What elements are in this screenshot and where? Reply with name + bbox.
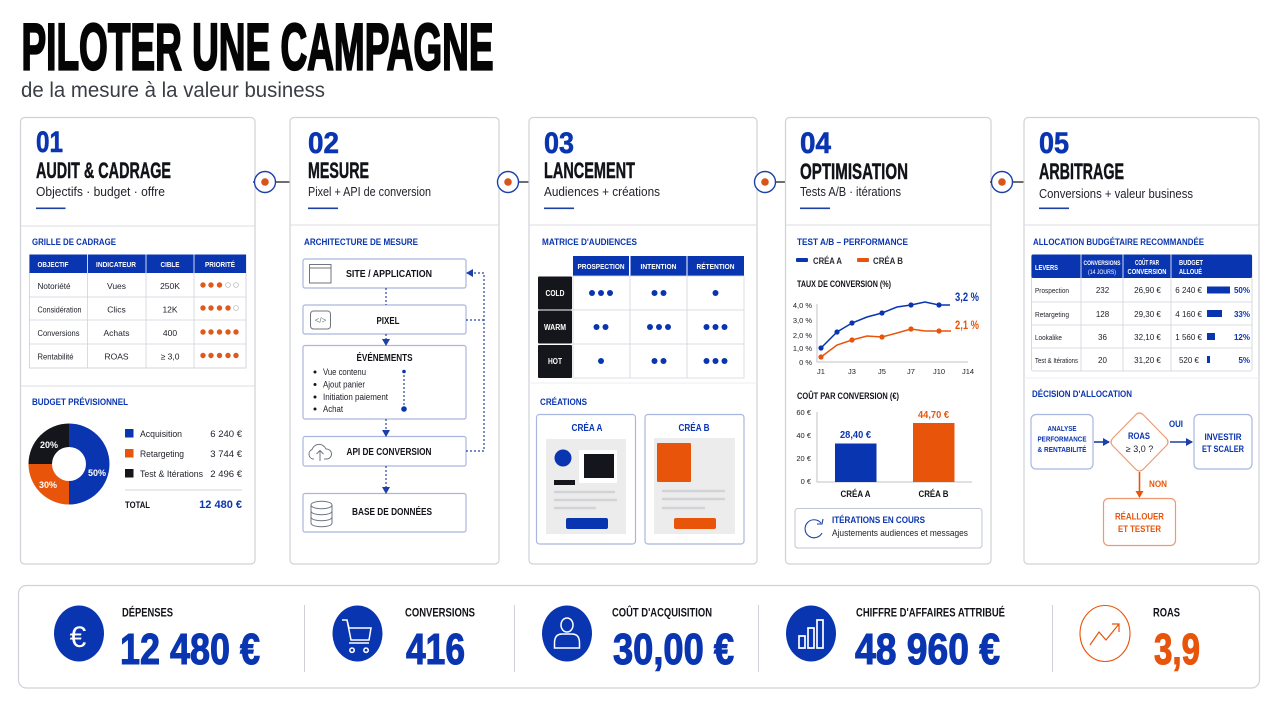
box: evenements: Ajout panier	[323, 380, 365, 390]
line chart: taux de conversion: 3,0 %	[793, 316, 812, 325]
KPI: depenses: €	[70, 621, 87, 654]
legend: budget: 6 240 €	[210, 429, 243, 440]
legend: budget	[125, 429, 243, 511]
box: analyse: PERFORMANCE	[1038, 436, 1087, 444]
table: allocation: 520 €	[1179, 356, 1200, 365]
step number 05: 05	[1039, 127, 1069, 160]
bar chart: cout par conversion: 0 €	[801, 477, 812, 486]
box: investir: INVESTIR	[1204, 432, 1242, 443]
table: allocation: Retargeting	[1035, 310, 1069, 319]
matrix: audiences: HOT	[548, 357, 562, 366]
bar chart: cout par conversion: 60 €	[796, 408, 812, 417]
donut chart: budget: 20%	[40, 440, 58, 450]
subheading: Audiences + créations	[544, 184, 660, 199]
line chart: taux de conversion: TAUX DE CONVERSION (%)	[797, 279, 891, 289]
table: allocation: 4 160 €	[1175, 310, 1203, 319]
bar chart: cout par conversion: 44,70 €	[918, 410, 949, 421]
heading: architecture de mesure: ARCHITECTURE DE MESURE	[304, 237, 418, 248]
box: reallouer	[1104, 498, 1176, 546]
table: allocation: BUDGET	[1179, 260, 1204, 267]
matrix: audiences: INTENTION	[640, 262, 676, 271]
table: allocation: Test & Itérations	[1035, 356, 1078, 365]
connector 3	[754, 172, 786, 192]
table: allocation: COÛT PAR	[1135, 258, 1159, 267]
table: allocation: 26,90 €	[1134, 286, 1161, 295]
box: investir	[1194, 414, 1252, 469]
card: crea A	[536, 414, 636, 544]
box: site application	[303, 259, 466, 288]
table: allocation: 5%	[1238, 356, 1250, 365]
donut chart: budget: 50%	[88, 468, 106, 478]
box: pixel: </>	[315, 316, 327, 325]
panel: 02 mesure	[290, 118, 499, 564]
table: allocation	[1032, 254, 1252, 371]
label: non: NON	[1149, 479, 1167, 490]
heading: audit et cadrage: AUDIT & CADRAGE	[36, 158, 171, 183]
bar chart: cout par conversion: 20 €	[796, 454, 812, 463]
bar chart: cout par conversion: COÛT PAR CONVERSION (€)	[797, 390, 899, 401]
heading: grille de cadrage: GRILLE DE CADRAGE	[32, 237, 116, 248]
heading: allocation budgetaire: ALLOCATION BUDGÉTAIRE RECOMMANDÉE	[1033, 237, 1204, 248]
table: grille de cadrage: 12K	[162, 304, 178, 314]
KPI: depenses: DÉPENSES	[122, 604, 173, 620]
bar chart: cout par conversion	[796, 390, 972, 500]
table: grille de cadrage: Vues	[107, 281, 126, 291]
legend: A/B: CRÉA B	[873, 256, 903, 267]
step number 02: 02	[308, 127, 339, 160]
line chart: taux de conversion: J10	[933, 367, 945, 376]
box: pixel: PIXEL	[376, 316, 400, 327]
box: base de donnees: BASE DE DONNÉES	[352, 505, 432, 518]
table: allocation: 32,10 €	[1134, 333, 1161, 342]
subtitle: de la mesure à la valeur business	[21, 79, 325, 102]
heading: arbitrage: ARBITRAGE	[1039, 159, 1124, 184]
matrix: audiences: WARM	[544, 323, 566, 332]
table: grille de cadrage: Rentabilité	[38, 352, 74, 362]
KPI: chiffre d'affaires: 48 960 €	[855, 626, 1000, 674]
legend: budget: 12 480 €	[199, 499, 242, 511]
table: allocation: 36	[1098, 333, 1107, 342]
KPI: conversions: CONVERSIONS	[405, 606, 475, 620]
arrow: oui	[1170, 441, 1192, 443]
card: crea B: CRÉA B	[678, 421, 710, 434]
legend: budget: Test & Itérations	[140, 469, 203, 480]
table: allocation: 1 560 €	[1175, 333, 1203, 342]
line chart: taux de conversion: 3,2 %	[955, 292, 979, 304]
line chart: taux de conversion: J1	[817, 367, 825, 376]
KPI: cout d'acquisition	[542, 604, 734, 674]
donut chart: budget: 30%	[39, 480, 57, 490]
line chart: taux de conversion: 2,0 %	[793, 331, 812, 340]
KPI: roas	[1080, 606, 1200, 674]
table: grille de cadrage: ROAS	[104, 352, 129, 362]
panel: 04 optimisation	[786, 118, 991, 564]
connector 2	[497, 172, 530, 192]
box: investir: ET SCALER	[1202, 444, 1244, 455]
subheading: Tests A/B · itérations	[800, 184, 901, 199]
box: evenements: ÉVÉNEMENTS	[356, 351, 413, 364]
table: allocation: 6 240 €	[1175, 286, 1203, 295]
table: grille de cadrage: ≥ 3,0	[161, 352, 180, 362]
line chart: taux de conversion	[793, 279, 979, 376]
box: pixel	[303, 305, 466, 334]
KPI: depenses: 12 480 €	[120, 626, 260, 674]
line chart: taux de conversion: 0 %	[799, 358, 812, 367]
table: allocation: 232	[1096, 286, 1110, 295]
heading: mesure: MESURE	[308, 158, 369, 183]
table: allocation: CONVERSION	[1128, 269, 1166, 276]
panel: 01 audit et cadrage	[20, 118, 255, 564]
box: evenements: Achat	[323, 404, 343, 414]
table: grille de cadrage: Achats	[104, 328, 130, 338]
table: allocation: 50%	[1234, 286, 1250, 295]
title: PILOTER UNE CAMPAGNE	[22, 10, 494, 84]
matrix: audiences: PROSPECTION	[578, 262, 624, 271]
box: base de donnees	[303, 494, 466, 532]
table: allocation: ALLOUÉ	[1179, 267, 1202, 276]
KPI: conversions	[332, 606, 475, 674]
KPI: depenses	[54, 604, 260, 674]
legend: budget: Acquisition	[140, 429, 182, 440]
underline	[544, 208, 574, 209]
table: grille de cadrage: 250K	[160, 281, 180, 291]
arrow: non	[1138, 472, 1140, 497]
KPI: chiffre d'affaires: CHIFFRE D'AFFAIRES ATTRIBUÉ	[856, 604, 1005, 620]
table: allocation: 33%	[1234, 310, 1250, 319]
table: allocation: 12%	[1234, 333, 1250, 342]
matrix: audiences: COLD	[546, 289, 565, 298]
bar chart: cout par conversion: 40 €	[796, 431, 812, 440]
table: allocation: LEVERS	[1035, 263, 1058, 272]
arrows: retour serveur	[466, 273, 484, 451]
table: allocation: (14 JOURS)	[1088, 269, 1116, 276]
box: evenements: Vue contenu	[323, 367, 366, 377]
box: analyse	[1031, 414, 1093, 469]
card: crea B	[645, 414, 744, 544]
legend: A/B: CRÉA A	[813, 256, 842, 267]
KPI: chiffre d'affaires	[786, 604, 1005, 674]
arrows: flux vertical	[385, 288, 387, 493]
heading: budget previsionnel: BUDGET PRÉVISIONNEL	[32, 397, 128, 408]
matrix: audiences	[538, 256, 744, 378]
heading: optimisation: OPTIMISATION	[800, 159, 908, 184]
table: grille de cadrage: PRIORITÉ	[205, 260, 235, 269]
box: reallouer: ET TESTER	[1118, 524, 1161, 535]
step number 01: 01	[36, 126, 63, 159]
legend: budget: 3 744 €	[210, 449, 243, 460]
legend: budget: TOTAL	[125, 500, 150, 510]
step number 03: 03	[544, 127, 574, 160]
diamond: roas: ≥ 3,0 ?	[1126, 444, 1153, 454]
table: allocation: Prospection	[1035, 286, 1069, 295]
panel: 05 arbitrage	[1024, 118, 1259, 564]
step number 04: 04	[800, 127, 831, 160]
legend: A/B	[796, 256, 903, 267]
callout: iterations en cours: ITÉRATIONS EN COURS	[832, 515, 925, 526]
panel: 03 lancement	[529, 118, 757, 564]
bar chart: cout par conversion: CRÉA A	[840, 489, 871, 500]
box: evenements: Initiation paiement	[323, 392, 388, 402]
diamond: roas	[1111, 413, 1168, 471]
table: allocation: 31,20 €	[1134, 356, 1161, 365]
subheading: Objectifs · budget · offre	[36, 184, 165, 199]
heading: test A/B: TEST A/B – PERFORMANCE	[797, 237, 908, 248]
table: grille de cadrage: Clics	[107, 304, 126, 314]
line chart: taux de conversion: J7	[907, 367, 915, 376]
card: crea A: CRÉA A	[572, 421, 603, 434]
callout: iterations en cours	[795, 508, 982, 548]
legend: budget: Retargeting	[140, 449, 184, 460]
flowchart: decision	[1031, 413, 1252, 546]
line chart: taux de conversion: J5	[878, 367, 886, 376]
underline	[1039, 208, 1069, 209]
underline	[36, 208, 66, 209]
heading: creations: CRÉATIONS	[540, 397, 587, 408]
table: grille de cadrage: Notoriété	[38, 281, 71, 291]
connector 4	[990, 172, 1025, 192]
line chart: taux de conversion: 2,1 %	[955, 320, 979, 332]
underline	[308, 208, 338, 209]
label: oui: OUI	[1169, 419, 1183, 430]
box: evenements	[303, 346, 466, 419]
arrow: vers roas	[1094, 441, 1109, 443]
connector 1	[253, 172, 291, 192]
subheading: Pixel + API de conversion	[308, 184, 431, 199]
box: analyse: & RENTABILITÉ	[1038, 445, 1087, 454]
table: allocation: Lookalike	[1035, 333, 1062, 342]
matrix: audiences: RÉTENTION	[696, 262, 734, 271]
table: grille de cadrage	[30, 254, 246, 368]
box: analyse: ANALYSE	[1048, 426, 1077, 433]
line chart: taux de conversion: J3	[848, 367, 856, 376]
table: grille de cadrage: 400	[163, 328, 177, 338]
table: grille de cadrage: INDICATEUR	[96, 260, 137, 269]
donut chart: budget	[28, 424, 110, 504]
legend: budget: 2 496 €	[210, 469, 243, 480]
table: allocation: CONVERSIONS	[1084, 260, 1121, 267]
table: grille de cadrage: OBJECTIF	[38, 260, 69, 269]
heading: matrice d'audiences: MATRICE D'AUDIENCES	[542, 237, 637, 248]
KPI: conversions: 416	[406, 626, 465, 674]
KPI: roas: 3,9	[1154, 626, 1200, 674]
panel: KPI	[18, 586, 1260, 688]
diamond: roas: ROAS	[1128, 431, 1150, 442]
line chart: taux de conversion: 1,0 %	[793, 344, 812, 353]
heading: decision d'allocation: DÉCISION D'ALLOCATION	[1032, 389, 1132, 400]
bar chart: cout par conversion: 28,40 €	[840, 430, 871, 441]
table: grille de cadrage: Conversions	[38, 328, 80, 338]
box: api de conversion	[303, 436, 466, 466]
box: api de conversion: API DE CONVERSION	[346, 447, 432, 458]
box: site application: SITE / APPLICATION	[346, 269, 432, 280]
table: allocation: 29,30 €	[1134, 310, 1161, 319]
line chart: taux de conversion: 4,0 %	[793, 301, 812, 310]
line chart: taux de conversion: J14	[962, 367, 974, 376]
underline	[800, 208, 830, 209]
box: reallouer: RÉALLOUER	[1115, 512, 1164, 522]
KPI: roas: ROAS	[1153, 606, 1180, 620]
KPI: cout d'acquisition: COÛT D'ACQUISITION	[612, 604, 712, 620]
bar chart: cout par conversion: CRÉA B	[918, 489, 949, 500]
table: allocation: 128	[1096, 310, 1110, 319]
callout: iterations en cours: Ajustements audiences et messages	[832, 528, 968, 538]
table: grille de cadrage: Considération	[38, 304, 82, 314]
KPI: cout d'acquisition: 30,00 €	[613, 626, 734, 674]
table: allocation: 20	[1098, 356, 1107, 365]
table: grille de cadrage: CIBLE	[160, 260, 180, 269]
heading: lancement: LANCEMENT	[544, 158, 635, 183]
subheading: Conversions + valeur business	[1039, 186, 1193, 201]
